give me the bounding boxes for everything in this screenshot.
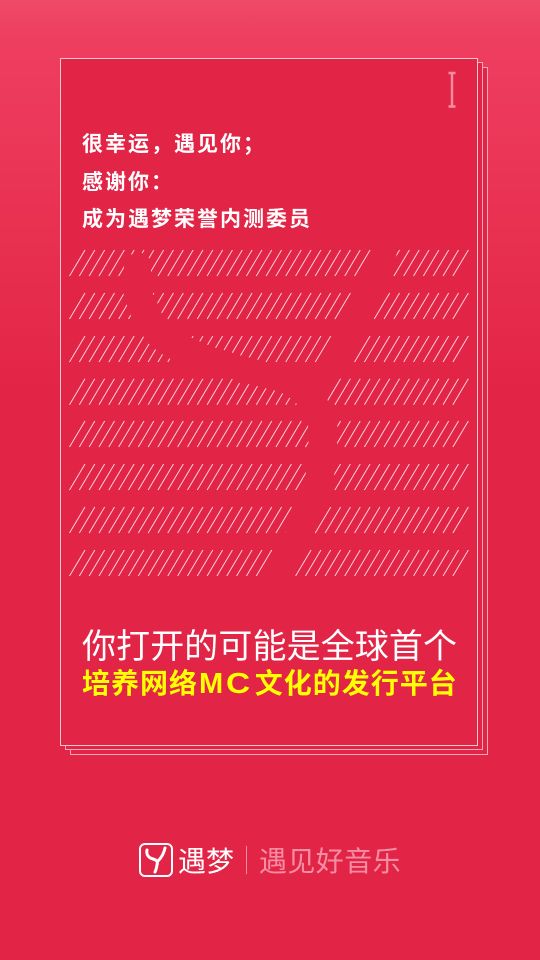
- panel: front sheet: [60, 58, 478, 746]
- brand tagline: 遇见好音乐: [259, 846, 401, 877]
- heading: thanks message: [82, 133, 312, 231]
- headline: yellow slogan: C: [226, 668, 250, 700]
- icon: text cursor: [448, 72, 456, 108]
- heading: thanks message: 成为遇梦荣誉内测委员: [82, 208, 312, 231]
- brand name: 遇梦: [178, 846, 234, 877]
- headline: white slogan: 你打开的可能是全球首个: [82, 628, 457, 666]
- panel: middle sheet: [65, 62, 483, 750]
- divider: [246, 846, 247, 874]
- panel: back sheet: [70, 67, 488, 755]
- headline: yellow slogan: 培养网络M 文化的发行平台: [82, 668, 458, 700]
- heading: thanks message: 很幸运，遇见你；: [82, 133, 266, 156]
- heading: thanks message: 感谢你：: [82, 171, 174, 194]
- icon: app logo: [139, 843, 173, 877]
